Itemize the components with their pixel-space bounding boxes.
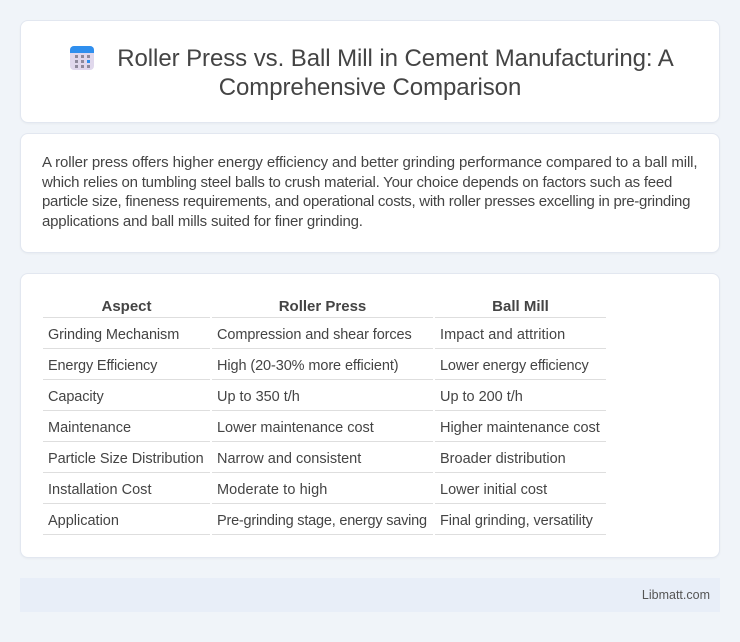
- row: Application: Application: [48, 513, 119, 529]
- row: Maintenance: Maintenance: [48, 420, 131, 436]
- header: Ball Mill: Ball Mill: [492, 298, 549, 315]
- row: Energy Efficiency: Lower energy efficiency: [440, 358, 589, 374]
- panel: table card: [20, 273, 720, 558]
- row: Maintenance: [48, 420, 600, 436]
- row: Particle Size Distribution: [48, 451, 566, 467]
- row: Grinding Mechanism: [48, 327, 565, 343]
- row: Energy Efficiency: Energy Efficiency: [48, 358, 157, 374]
- row: Particle Size Distribution: Particle Size Distribution: [48, 451, 204, 467]
- row: Energy Efficiency: [48, 358, 589, 374]
- header: Roller Press: Roller Press: [279, 298, 366, 315]
- icon: calendar: [70, 46, 94, 70]
- row: Installation Cost: Moderate to high: [217, 482, 327, 498]
- row: Particle Size Distribution: Narrow and consistent: [217, 451, 361, 467]
- row: Energy Efficiency: High (20-30% more efficient): [217, 358, 398, 374]
- header: Aspect: Aspect: [101, 298, 152, 315]
- intro paragraph: which relies on tumbling steel balls to crush material. Your choice depends on factors such as feed: [42, 174, 672, 191]
- intro paragraph: [42, 154, 697, 230]
- row: Installation Cost: Lower initial cost: [440, 482, 547, 498]
- row: Grinding Mechanism: Compression and shear forces: [217, 327, 412, 343]
- intro paragraph: particle size, fineness requirements, and operational costs, with roller presses excelling in pre-grinding: [42, 193, 690, 210]
- panel: title card: [20, 20, 720, 123]
- row: Capacity: Up to 200 t/h: [440, 389, 523, 405]
- row: Particle Size Distribution: Broader distribution: [440, 451, 566, 467]
- row: Installation Cost: Installation Cost: [48, 482, 152, 498]
- footer text: Libmatt.com: [642, 588, 710, 602]
- row: Maintenance: Higher maintenance cost: [440, 420, 600, 436]
- panel: intro card: [20, 133, 720, 253]
- row: Capacity: Capacity: [48, 389, 104, 405]
- intro paragraph: A roller press offers higher energy efficiency and better grinding performance compared to a ball mill,: [42, 154, 697, 171]
- row: Capacity: Up to 350 t/h: [217, 389, 300, 405]
- title: [117, 45, 674, 101]
- intro paragraph: applications and ball mills suited for finer grinding.: [42, 213, 363, 230]
- row: Application: Pre-grinding stage, energy saving: [217, 513, 427, 529]
- footer bar: [20, 578, 720, 612]
- row: Grinding Mechanism: Impact and attrition: [440, 327, 565, 343]
- row: Application: Final grinding, versatility: [440, 513, 593, 529]
- row: Maintenance: Lower maintenance cost: [217, 420, 374, 436]
- row: Capacity: [48, 389, 523, 405]
- row: Installation Cost: [48, 482, 548, 498]
- title: Comprehensive Comparison: [219, 74, 521, 101]
- row: Application: [48, 513, 593, 529]
- row: Grinding Mechanism: Grinding Mechanism: [48, 327, 179, 343]
- title: Roller Press vs. Ball Mill in Cement Manufacturing: A: [117, 45, 674, 72]
